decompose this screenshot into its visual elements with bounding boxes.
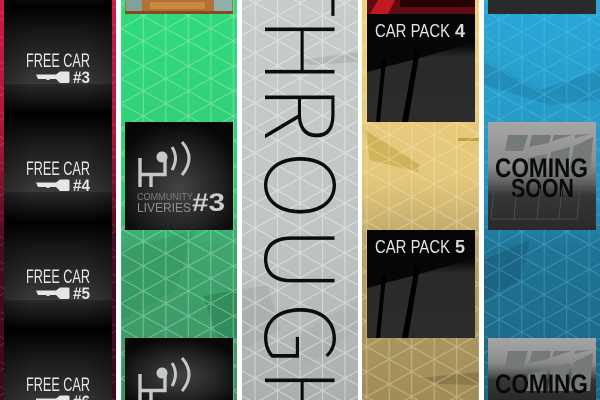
free car #5 label [26,267,90,303]
coming soon tile lower [488,338,596,400]
car pack 4 tile [367,14,475,122]
coming soon tile [488,122,596,230]
community liveries tile (lower) [125,338,233,400]
free car #5 label: #5 [73,284,90,303]
car pack 5 tile: CAR PACK [375,237,450,257]
panel: green community liveries column [121,0,237,400]
free car #5 label: FREE CAR [26,267,90,288]
car pack 4 tile: 4 [455,21,465,41]
icon: film logo lower [505,350,593,391]
free car #4 label: FREE CAR [26,159,90,180]
coming soon tile: SOON [511,173,574,203]
vertical title THROUGH: H [237,17,376,84]
car pack 4 tile: CAR PACK [375,21,450,41]
community liveries #3 tile: LIVERIES [137,200,191,215]
vertical title THROUGH: R [237,85,376,142]
free car #3 label [26,51,90,87]
panel: grey through column [237,0,376,400]
free car #4 label: #4 [73,176,90,195]
icon: gear shift signal [138,142,189,187]
community liveries #3 tile: #3 [192,189,225,217]
vertical title THROUGH: G [237,302,376,365]
car pack 5 tile [367,230,475,338]
free car #6 label [26,375,90,400]
community liveries #3 tile [125,122,233,230]
car pack 5 tile: 5 [455,237,465,257]
dark tile top [488,0,596,14]
rust image tile [125,0,233,14]
free car #3 label: FREE CAR [26,51,90,72]
icon: film logo [505,134,593,175]
community liveries #3 tile: COMMUNITY [137,192,193,203]
panel: red free car column [0,0,116,400]
free car #3 label: #3 [73,68,90,87]
panel: blue coming soon column [484,0,600,400]
vertical title THROUGH: O [237,151,376,220]
free car #6 label: FREE CAR [26,375,90,396]
icon: gear shift signal lower [138,358,189,400]
red car image [367,0,475,14]
panel: gold car pack column [362,0,479,400]
free car #4 label [26,159,90,195]
vertical title THROUGH: U [237,226,376,293]
vertical title THROUGH [237,0,376,400]
